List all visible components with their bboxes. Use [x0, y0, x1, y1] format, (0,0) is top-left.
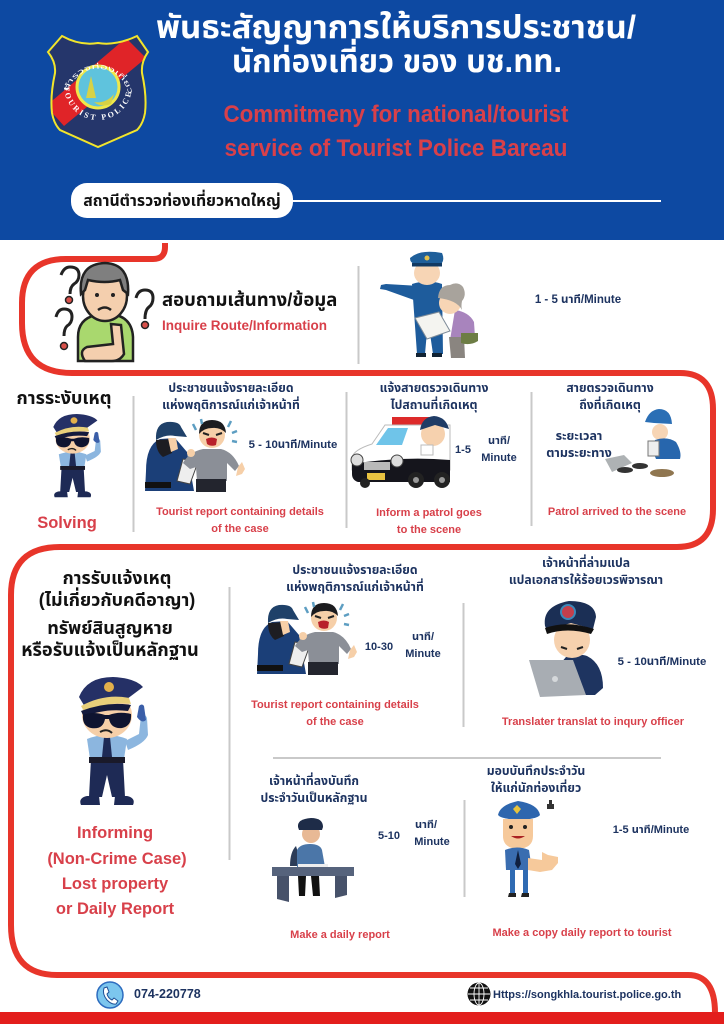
- step: daily report: Minute: [414, 836, 450, 848]
- english label: Lost property: [62, 875, 169, 893]
- icon: patrol inspecting: [605, 409, 680, 477]
- footer: website: Https://songkhla.tourist.police.go.th: [493, 989, 682, 1001]
- station pill: สถานีตำรวจท่องเที่ยวหาดใหญ่: [83, 189, 281, 210]
- step: arrived: ถึงที่เกิดเหตุ: [579, 396, 641, 412]
- step: report: นาที/: [412, 631, 434, 643]
- panel: informing: [21, 554, 706, 941]
- heading: ทรัพย์สินสูญหาย: [47, 618, 173, 639]
- english label: Inquire Route/Information: [162, 318, 327, 333]
- divider: [132, 396, 134, 532]
- english label: or Daily Report: [56, 900, 175, 918]
- panel: inquire: [56, 252, 621, 364]
- step: report: ประชาชนแจ้งรายละเอียด: [292, 563, 418, 577]
- icon: thumbs up officer: [498, 801, 558, 897]
- footer: phone: 074-220778: [134, 987, 201, 1001]
- icon: officer large: [79, 677, 148, 805]
- heading: การรับแจ้งเหตุ: [63, 568, 171, 589]
- footer: phone: [97, 982, 201, 1008]
- step: daily report: 5-10: [378, 830, 400, 842]
- step: arrived: Patrol arrived to the scene: [548, 506, 686, 518]
- divider: [462, 603, 464, 727]
- bottom bar: [0, 1012, 724, 1024]
- icon: phone: [97, 982, 123, 1008]
- badge logo: ตำรวจท่องเที่ยว: [64, 62, 132, 94]
- step: arrived: สายตรวจเดินทาง: [566, 381, 654, 395]
- step: patrol: 1-5: [455, 444, 471, 456]
- step: daily report: เจ้าหน้าที่ลงบันทึก: [269, 772, 359, 788]
- step: copy: Make a copy daily report to tourist: [492, 927, 672, 939]
- step: report: [251, 563, 441, 728]
- english label: (Non-Crime Case): [47, 850, 187, 868]
- step: arrived: ระยะเวลา: [556, 429, 602, 443]
- english subtitle: service of Tourist Police Bareau: [224, 135, 568, 162]
- step: report: of the case: [211, 523, 269, 535]
- icon: small mark: [547, 800, 554, 809]
- step: patrol: ไปสถานที่เกิดเหตุ: [390, 396, 478, 412]
- divider: [346, 392, 348, 528]
- heading: (ไม่เกี่ยวกับคดีอาญา): [39, 587, 195, 610]
- icon: officer at desk: [272, 818, 354, 902]
- step: translator: เจ้าหน้าที่ล่ามแปล: [542, 554, 630, 570]
- step: report: [145, 381, 337, 535]
- step: report: of the case: [306, 716, 364, 728]
- divider: [228, 587, 230, 860]
- english subtitle: Commitmeny for national/tourist: [224, 101, 568, 128]
- heading: [21, 568, 199, 660]
- heading: สอบถามเส้นทาง/ข้อมูล: [162, 289, 337, 311]
- step: patrol: Inform a patrol goes: [376, 507, 482, 519]
- footer: website: [468, 983, 682, 1005]
- divider: [273, 757, 661, 759]
- icon: officer helping woman: [380, 252, 478, 358]
- step: report: แห่งพฤติการณ์แก่เจ้าหน้าที่: [162, 396, 300, 412]
- step: report: Minute: [405, 648, 441, 660]
- label: Solving: [37, 514, 97, 532]
- step: arrived: [546, 381, 686, 518]
- step: report: 10-30: [365, 641, 393, 653]
- title: พันธะสัญญาการให้บริการประชาชน/: [156, 9, 636, 45]
- step: translator: แปลเอกสารให้ร้อยเวรพิจารณา: [509, 573, 663, 587]
- step: patrol: [351, 381, 517, 536]
- step: patrol: Minute: [481, 452, 517, 464]
- step: report: Tourist report containing details: [251, 699, 419, 711]
- heading: การระงับเหตุ: [17, 388, 111, 409]
- step: daily report: ประจำวันเป็นหลักฐาน: [261, 791, 367, 805]
- step: report: แห่งพฤติการณ์แก่เจ้าหน้าที่: [286, 578, 424, 594]
- icon: officer with laptop: [529, 601, 603, 697]
- step: daily report: Make a daily report: [290, 929, 390, 941]
- step: patrol: แจ้งสายตรวจเดินทาง: [380, 381, 488, 395]
- step: translator: 5 - 10นาที/Minute: [618, 655, 706, 668]
- title: นักท่องเที่ยว ของ บช.ทท.: [232, 38, 562, 79]
- step: copy: [487, 764, 689, 939]
- station pill: [71, 183, 661, 218]
- icon: officer: [53, 414, 101, 497]
- icon: globe: [468, 983, 490, 1005]
- time: 1 - 5 นาที/Minute: [535, 293, 621, 306]
- english label: [47, 824, 187, 918]
- step: report: Tourist report containing details: [156, 506, 324, 518]
- step: daily report: นาที/: [415, 819, 437, 831]
- step: translator: [502, 554, 706, 728]
- step: arrived: ตามระยะทาง: [546, 446, 612, 460]
- icon: confused man: [56, 263, 153, 361]
- english subtitle: [224, 101, 568, 162]
- step: report: 5 - 10นาที/Minute: [249, 438, 337, 451]
- step: copy: 1-5 นาที/Minute: [613, 824, 689, 836]
- panel: solving: [17, 381, 686, 536]
- step: patrol: นาที/: [488, 435, 510, 447]
- step: translator: Translater translat to inqury officer: [502, 716, 685, 728]
- divider: [530, 392, 532, 526]
- step: daily report: [261, 772, 450, 941]
- title: [156, 9, 636, 79]
- badge logo: TOURIST POLICE: [64, 86, 132, 120]
- step: copy: มอบบันทึกประจำวัน: [487, 764, 585, 778]
- icon: police car: [351, 416, 450, 488]
- english label: Informing: [77, 824, 153, 842]
- step: patrol: to the scene: [397, 524, 461, 536]
- red frame: route: [11, 243, 715, 1013]
- divider: [358, 266, 360, 364]
- header band: [0, 0, 724, 240]
- heading: หรือรับแจ้งเป็นหลักฐาน: [21, 640, 199, 660]
- divider: [464, 800, 466, 897]
- step: report: ประชาชนแจ้งรายละเอียด: [168, 381, 294, 395]
- step: copy: ให้แก่นักท่องเที่ยว: [491, 779, 581, 795]
- badge logo: [46, 34, 150, 148]
